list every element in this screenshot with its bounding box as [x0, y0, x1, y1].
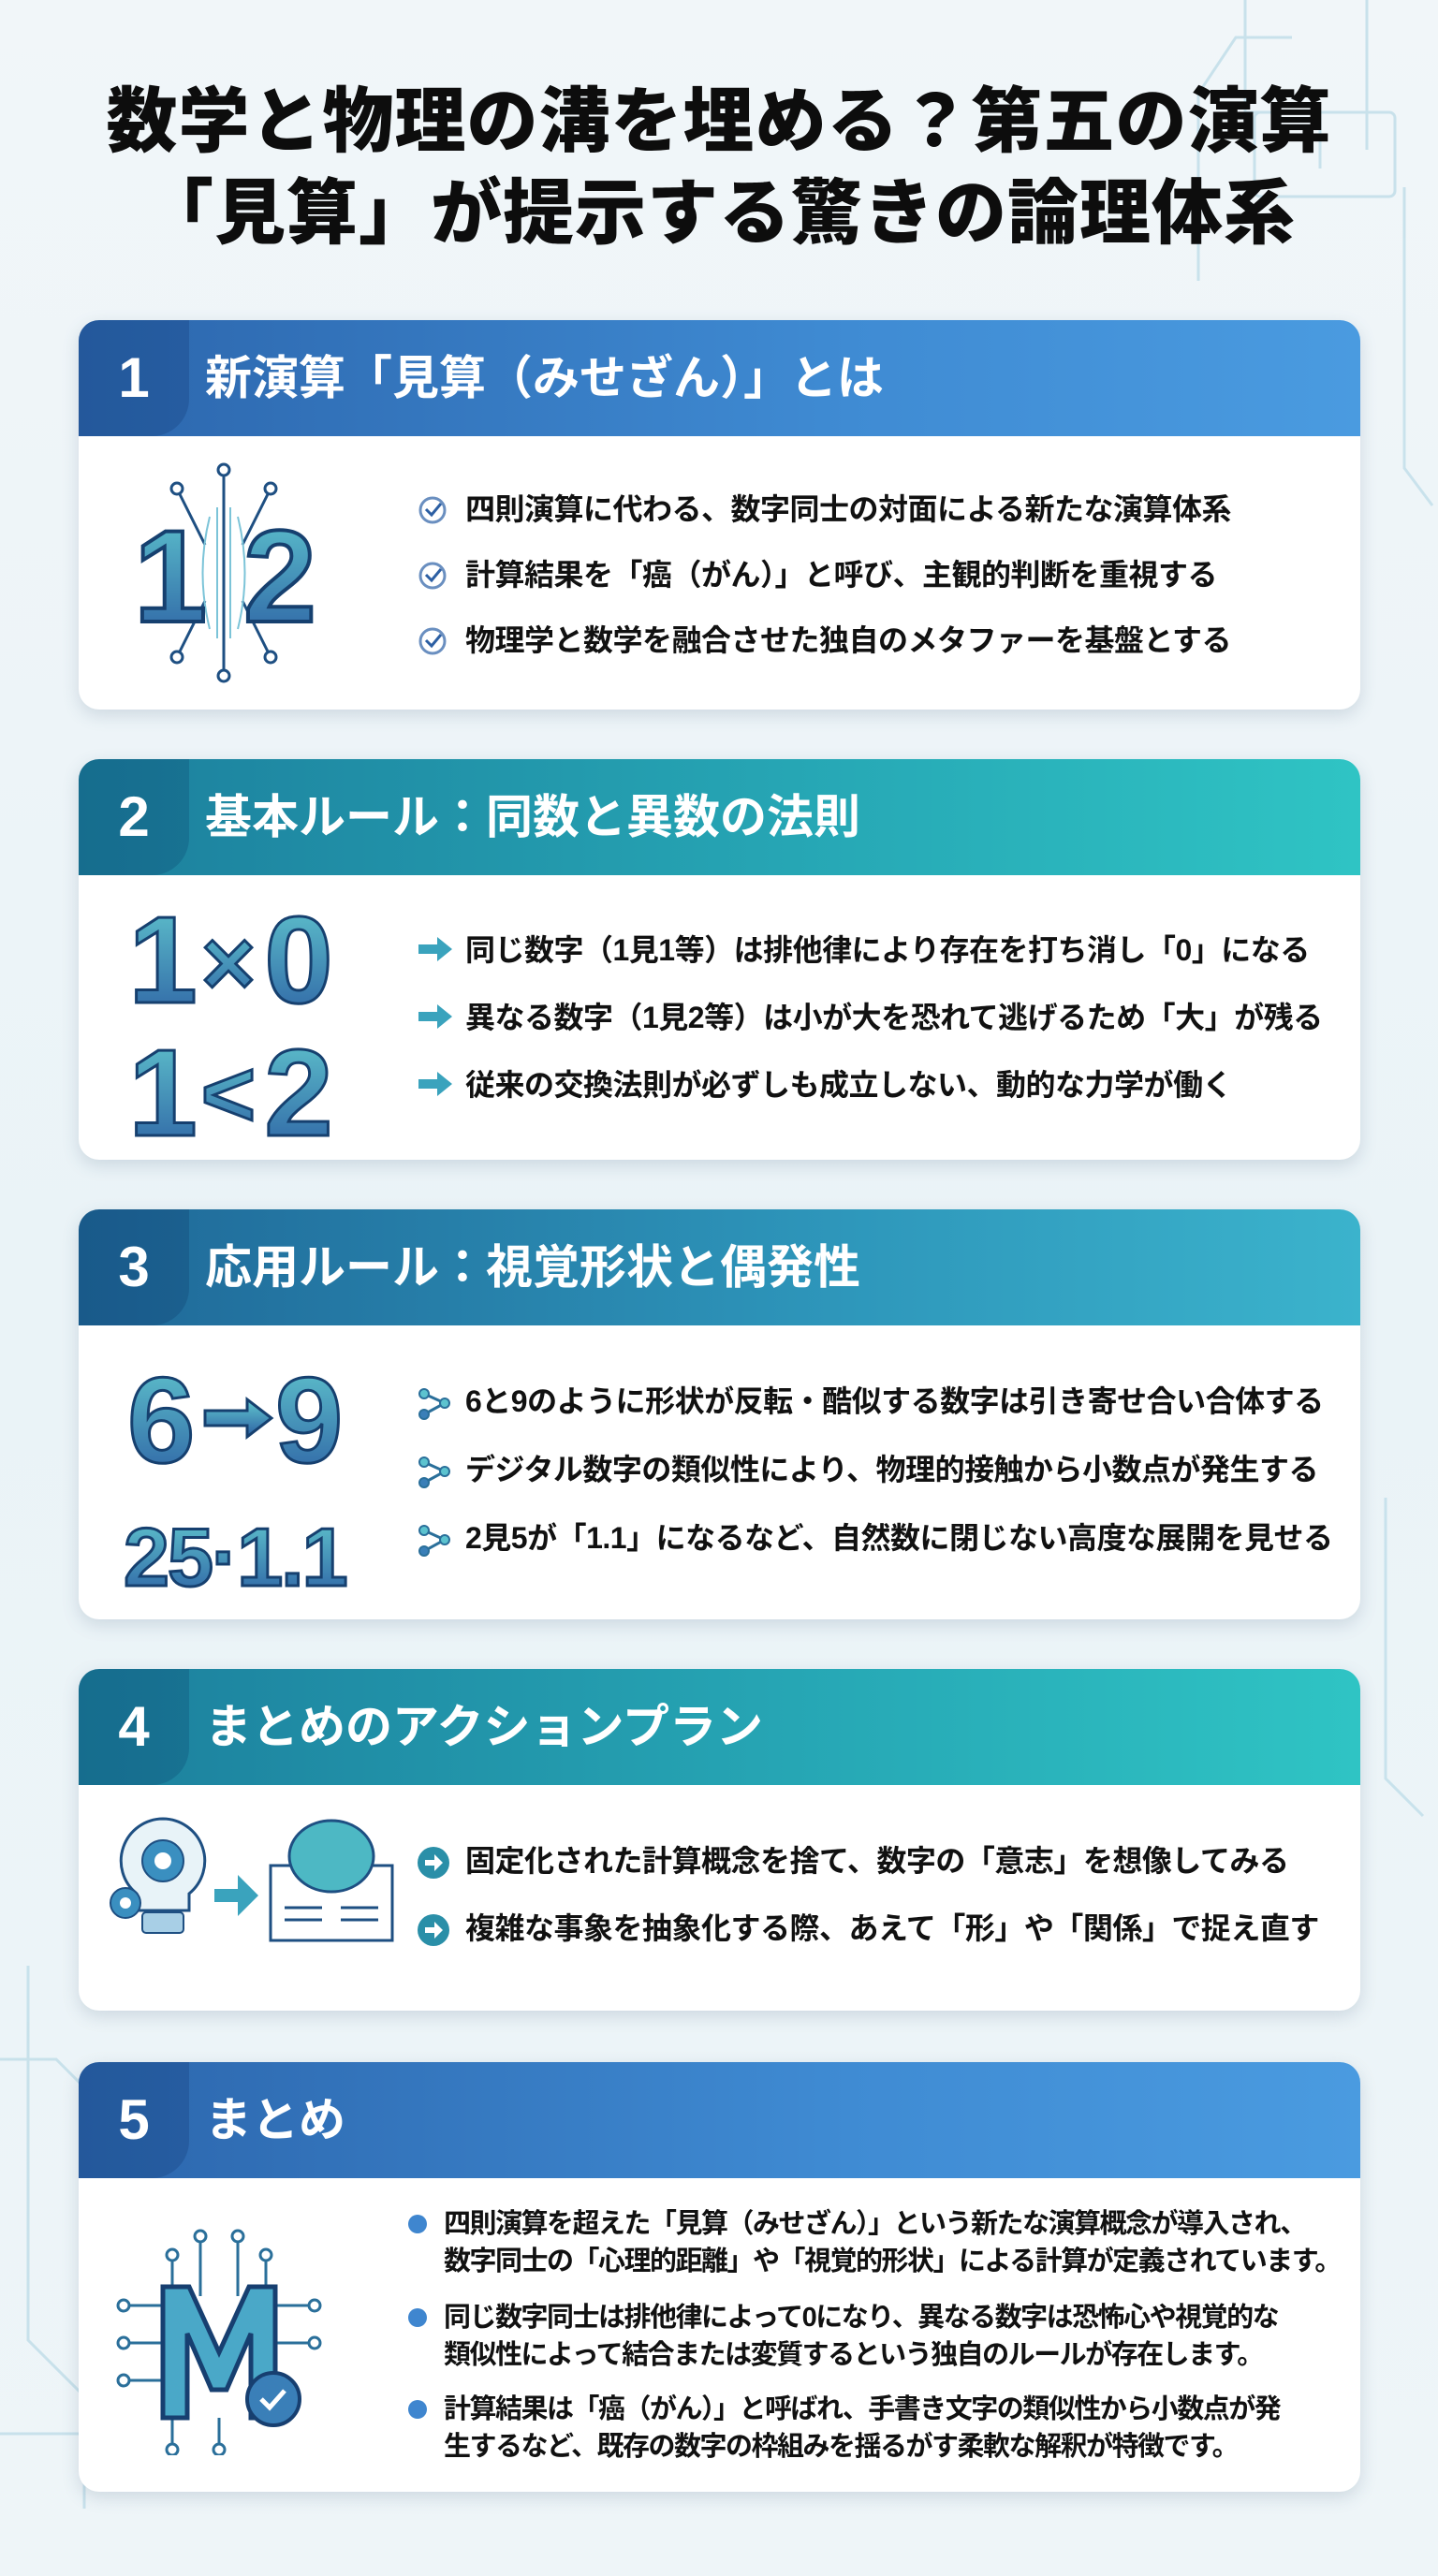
panel: 3 applied rules: [79, 1209, 1360, 1619]
panel: 3 applied rules: 2見5が「1.1」になるなど、自然数に閉じない高度な展開を見せる: [465, 1521, 1332, 1555]
icon: 1)(2: 1: [134, 503, 207, 650]
bullets 5: [408, 2209, 1341, 2462]
icon: 1x0 1<2: [128, 891, 333, 1152]
panel: 5 summary: 同じ数字同士は排他律によって0になり、異なる数字は恐怖心や視覚的な: [444, 2303, 1278, 2333]
icon: 1)(2: [134, 462, 316, 683]
panel: 5 summary: 計算結果は「癌（がん）」と呼ばれ、手書き文字の類似性から小数点が発: [444, 2394, 1280, 2424]
header 5: [79, 2062, 1360, 2178]
panel: 1 new operation: [79, 320, 1360, 710]
header 1: 新演算「見算（みせざん）」とは: [205, 352, 884, 404]
icon: 1x0 1<2: 1: [128, 891, 198, 1029]
bullets 3: [418, 1384, 1332, 1557]
panel: 1 new operation: 計算結果を「癌（がん）」と呼び、主観的判断を重視する: [465, 558, 1217, 592]
panel: 4 action plan: 固定化された計算概念を捨て、数字の「意志」を想像してみる: [465, 1844, 1288, 1878]
icon: 6→9 25·1.1: 25·1.1: [124, 1511, 346, 1603]
header 3: [79, 1209, 1360, 1325]
header 2: 2: [118, 785, 150, 848]
icon: 6→9 25·1.1: 6: [127, 1352, 195, 1488]
icon: 1x0 1<2: <: [201, 1042, 256, 1147]
icon: 1)(2: 2: [243, 503, 316, 650]
panel: 5 summary: 類似性によって結合または変質するという独自のルールが存在します。: [444, 2340, 1263, 2370]
panel: 5 summary: [79, 2062, 1360, 2492]
icon: 1x0 1<2: ×: [201, 911, 256, 1016]
panel: 2 basic rules: 従来の交換法則が必ずしも成立しない、動的な力学が働く: [465, 1068, 1232, 1102]
bullets 1: [419, 492, 1231, 657]
panel: 5 summary: 四則演算を超えた「見算（みせざん）」という新たな演算概念が導入され、: [444, 2209, 1306, 2239]
icon: 6→9 25·1.1: 9: [275, 1352, 343, 1488]
panel: 2 basic rules: [79, 759, 1360, 1160]
header 5: まとめ: [205, 2094, 345, 2146]
icon: 1x0 1<2: 0: [264, 891, 333, 1029]
title: 「見算」が提示する驚きの論理体系: [142, 174, 1296, 254]
header 3: 3: [118, 1236, 150, 1298]
panel: 3 applied rules: 6と9のように形状が反転・酷似する数字は引き寄せ合い合体する: [465, 1384, 1324, 1418]
header 4: まとめのアクションプラン: [205, 1701, 763, 1753]
header 3: 応用ルール：視覚形状と偶発性: [205, 1241, 860, 1294]
bullets 2: [418, 933, 1323, 1102]
panel: 4 action plan: [79, 1669, 1360, 2011]
icon: M circuit: [116, 2230, 322, 2455]
bullets 4: [418, 1844, 1319, 1946]
header 2: 基本ルール：同数と異数の法則: [205, 791, 860, 843]
header 1: [79, 320, 1360, 436]
panel: 4 action plan: 複雑な事象を抽象化する際、あえて「形」や「関係」で捉え直す: [465, 1911, 1319, 1945]
header 2: [79, 759, 1360, 875]
header 1: 1: [118, 346, 150, 409]
header 4: [79, 1669, 1360, 1785]
panel: 1 new operation: 物理学と数学を融合させた独自のメタファーを基盤とする: [465, 623, 1231, 657]
panel: 2 basic rules: 異なる数字（1見2等）は小が大を恐れて逃げるため「大」が残る: [465, 1001, 1323, 1034]
icon: bulb to brain book: [110, 1818, 393, 1941]
panel: 1 new operation: 四則演算に代わる、数字同士の対面による新たな演算体系: [465, 492, 1231, 526]
icon: 6→9 25·1.1: [124, 1352, 347, 1603]
title: [107, 82, 1331, 254]
panel: 5 summary: 生するなど、既存の数字の枠組みを揺るがす柔軟な解釈が特徴です。: [444, 2432, 1238, 2462]
title: 数学と物理の溝を埋める？第五の演算: [107, 82, 1331, 162]
panel: 3 applied rules: デジタル数字の類似性により、物理的接触から小数点が発生する: [465, 1453, 1318, 1486]
header 5: 5: [118, 2088, 150, 2151]
header 4: 4: [118, 1695, 150, 1758]
panel: 2 basic rules: 同じ数字（1見1等）は排他律により存在を打ち消し「0」になる: [465, 933, 1310, 967]
panel: 5 summary: 数字同士の「心理的距離」や「視覚的形状」による計算が定義されています。: [444, 2247, 1341, 2276]
